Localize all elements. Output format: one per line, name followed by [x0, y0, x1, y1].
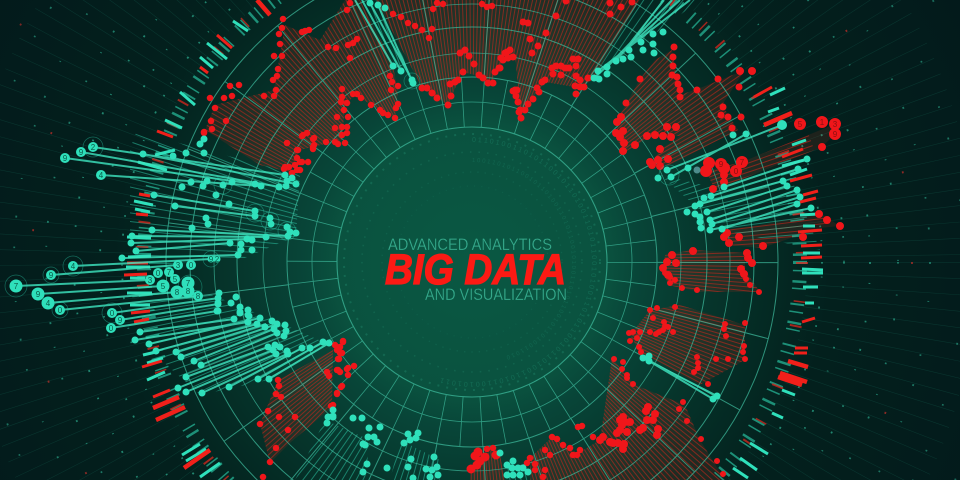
data point digits: 7	[186, 279, 191, 288]
data point digits: 5	[161, 282, 166, 291]
headline: big data: BIG DATA	[385, 246, 566, 294]
data point digits: 9	[36, 290, 41, 299]
data point digits: 9	[49, 271, 54, 280]
cyan wedges	[227, 17, 717, 480]
digit tunnel: 0 1 1 0 1 0 0 1 1 0 1 0 1 1 0 0 1 0 1 1 0 1 0 0 1 1 0 1 0 1 1 0 0 1 0 1 0 0 1 1 0 1 0 1 1 0 0 1 0 1 1 0 1 0 0 1 1 0 1 0 1 1 0 0 1 0 1 0 1 1	[441, 137, 597, 387]
data point digits: 3	[833, 120, 838, 129]
digit tunnel	[343, 133, 601, 391]
data point digits: 7	[740, 158, 745, 167]
data point digits: 8	[196, 292, 201, 301]
polar grid	[166, 0, 778, 480]
data point digits: 5	[173, 275, 178, 284]
red wedges	[206, 0, 836, 480]
title block	[385, 235, 567, 304]
subtitle: and visualization: AND VISUALIZATION	[425, 286, 567, 304]
cyan spokes	[16, 0, 811, 399]
data point digits: 4	[46, 299, 51, 308]
data point digits: 8	[175, 288, 180, 297]
data point digits: 0	[58, 306, 63, 315]
halos around data points	[5, 73, 679, 323]
data point digits: 0	[109, 324, 114, 333]
data point digits: 7	[14, 282, 19, 291]
digit tunnel: 1 0 0 1 1 0 1 0 1 1 0 0 1 0 1 1 0 1 0 0 1 1 0 1 0 1 1 0 0 1 0 1 0 0 1 1 0 1 0 1 1 0 0 1 0 1 1 0 1 0 0 1 1 0 1 0	[472, 158, 576, 360]
data point digits: 9	[719, 160, 724, 169]
data point digits: 7	[167, 268, 172, 277]
data point digits: 9	[63, 154, 68, 163]
data point digits: 0	[110, 309, 115, 318]
data point digits: 3	[176, 261, 181, 270]
data point digits	[14, 118, 838, 333]
data point digits: 0	[156, 269, 161, 278]
data point digits: 4	[71, 262, 76, 271]
data point digits: 5	[798, 120, 803, 129]
data point digits: 1	[820, 118, 825, 127]
outer ring bars	[124, 0, 823, 480]
data point digits: 4	[99, 171, 104, 180]
data point digits: 3	[148, 276, 153, 285]
data point digits: 9	[209, 255, 214, 264]
data point digits: 2	[91, 143, 96, 152]
subtitle: advanced analytics: ADVANCED ANALYTICS	[388, 235, 552, 254]
data point digits: 0	[734, 167, 739, 176]
data point digits: 0	[189, 261, 194, 270]
data point digits: 8	[186, 287, 191, 296]
red data points	[204, 1, 840, 477]
data point digits: 2	[215, 255, 220, 264]
data point digits: 9	[833, 130, 838, 139]
data point digits: 9	[79, 148, 84, 157]
data point digits: 9	[118, 316, 123, 325]
